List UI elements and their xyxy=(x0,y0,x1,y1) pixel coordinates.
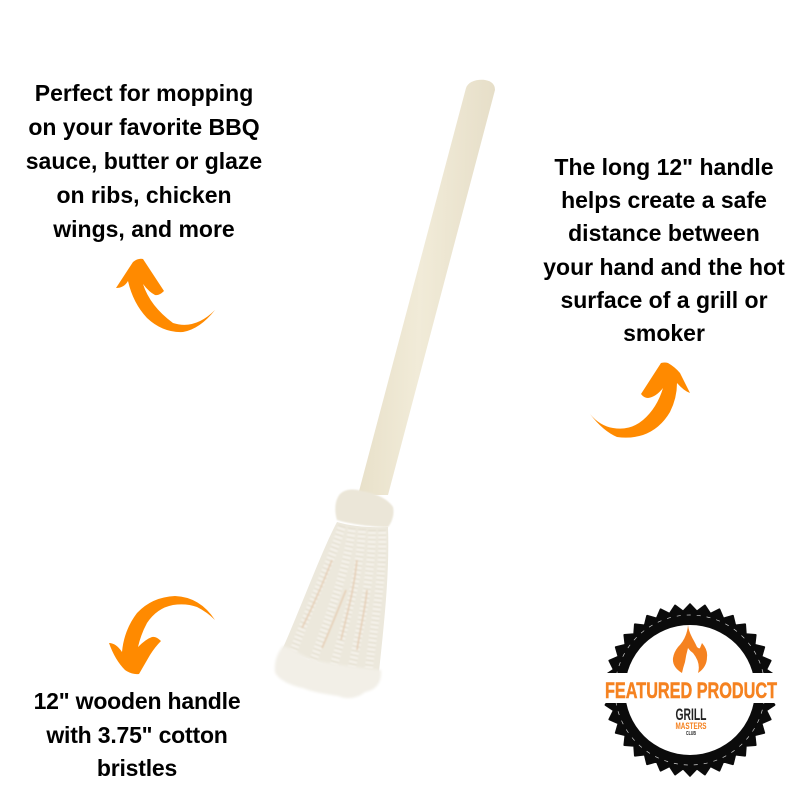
badge logo text: MASTERS xyxy=(676,721,706,732)
text: long handle benefit: The long 12" handle xyxy=(554,154,774,180)
text: long handle benefit: distance between xyxy=(568,220,760,246)
text: dimensions: 12" wooden handle xyxy=(34,688,240,714)
text: mopping uses: Perfect for mopping xyxy=(35,80,253,106)
text: long handle benefit: smoker xyxy=(623,320,705,346)
badge flame icon xyxy=(673,625,707,673)
text: long handle benefit: your hand and the hot xyxy=(543,254,785,280)
badge logo text: CLUB xyxy=(686,731,696,737)
text: dimensions xyxy=(34,688,240,781)
text: mopping uses: sauce, butter or glaze xyxy=(26,148,262,174)
mop wooden handle xyxy=(358,80,495,495)
mop cotton strands xyxy=(282,522,388,682)
text: mopping uses: wings, and more xyxy=(53,216,235,242)
text: long handle benefit: surface of a grill or xyxy=(560,287,768,313)
text: mopping uses: on your favorite BBQ xyxy=(28,114,260,140)
text: dimensions: bristles xyxy=(97,755,177,781)
text: long handle benefit xyxy=(543,154,785,346)
text: dimensions: with 3.75" cotton xyxy=(46,722,228,748)
badge scalloped black seal xyxy=(604,604,776,776)
badge logo text: GRILL xyxy=(676,706,706,724)
text: mopping uses: on ribs, chicken xyxy=(56,182,232,208)
badge logo text xyxy=(676,706,706,737)
mop cotton collar xyxy=(335,489,394,527)
text: mopping uses xyxy=(26,80,262,242)
text: long handle benefit: helps create a safe xyxy=(561,187,767,213)
mop frayed tip xyxy=(275,646,381,698)
